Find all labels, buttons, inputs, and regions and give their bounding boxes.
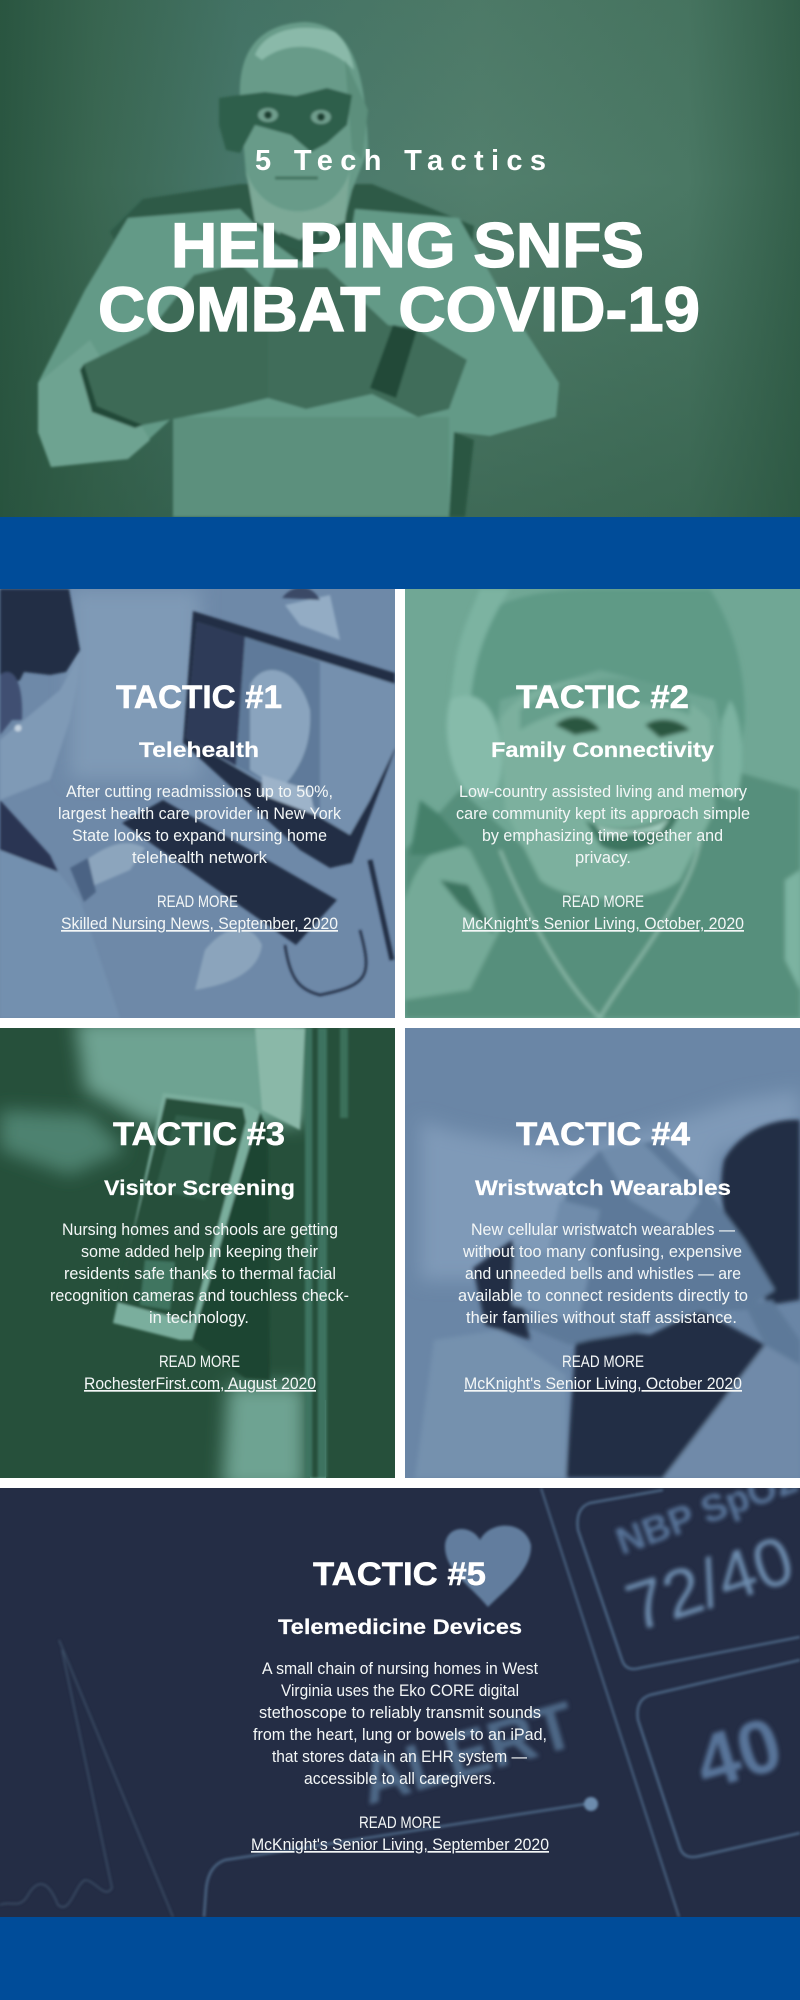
hero title: HELPING SNFS <box>171 211 644 281</box>
subheading: Telemedicine Devices <box>278 1616 522 1639</box>
read more link: READ MORE <box>159 1352 240 1371</box>
photo: clinician on video call <box>0 587 395 1018</box>
body text: their families without staff assistance. <box>466 1308 737 1327</box>
body text: and unneeded bells and whistles — are <box>465 1264 741 1283</box>
body text: telehealth network <box>132 848 267 867</box>
read more link <box>462 892 744 933</box>
body text: privacy. <box>575 848 631 867</box>
panel: tactic 4 wristwatch wearables <box>405 1028 800 1478</box>
blue band: bottom <box>0 1917 800 2000</box>
photo: thermal facial recognition device on door <box>0 1020 395 1490</box>
body text: stethoscope to reliably transmit sounds <box>259 1703 541 1722</box>
panel: tactic 1 telehealth <box>0 587 395 1018</box>
panel: hero header <box>0 0 800 517</box>
subheading: Visitor Screening <box>104 1177 295 1200</box>
read more link <box>464 1352 742 1393</box>
body text: that stores data in an EHR system — <box>272 1747 527 1766</box>
panel: tactic 2 family connectivity <box>405 589 800 1018</box>
monitor heart symbol <box>445 1526 531 1607</box>
body text: in technology. <box>149 1308 249 1327</box>
read more link <box>251 1813 549 1854</box>
body text: Virginia uses the Eko CORE digital <box>281 1681 519 1700</box>
heading: TACTIC #1 <box>116 679 282 715</box>
body text <box>456 782 750 867</box>
hero photo: masked senior superhero with boxing gloves <box>0 0 800 517</box>
body text <box>58 782 341 867</box>
hero subtitle: 5 Tech Tactics <box>255 145 546 177</box>
read more link: READ MORE <box>562 892 644 911</box>
body text: After cutting readmissions up to 50%, <box>66 782 333 801</box>
body text: largest health care provider in New York <box>58 804 341 823</box>
read more link: McKnight's Senior Living, October 2020 <box>464 1374 742 1393</box>
body text: Nursing homes and schools are getting <box>62 1220 338 1239</box>
photo: patient monitor screen <box>0 1459 800 1917</box>
body text <box>50 1220 349 1327</box>
hero title <box>98 211 700 345</box>
read more link <box>61 892 338 933</box>
read more link: Skilled Nursing News, September, 2020 <box>61 914 338 933</box>
read more link: READ MORE <box>157 892 238 911</box>
panel: tactic 3 visitor screening <box>0 1020 395 1490</box>
photo: elderly hands with smartwatch <box>405 1028 800 1478</box>
monitor frames and traces <box>0 1488 800 1917</box>
body text: without too many confusing, expensive <box>462 1242 742 1261</box>
body text: from the heart, lung or bowels to an iPad, <box>253 1725 547 1744</box>
body text: recognition cameras and touchless check- <box>50 1286 349 1305</box>
body text: some added help in keeping their <box>81 1242 318 1261</box>
monitor readouts: 40 <box>686 1701 791 1806</box>
read more link <box>84 1352 316 1393</box>
heading: TACTIC #4 <box>516 1116 690 1152</box>
heading: TACTIC #5 <box>313 1556 486 1592</box>
blue band: top <box>0 517 800 589</box>
read more link: READ MORE <box>562 1352 644 1371</box>
monitor readouts <box>368 1488 800 1806</box>
body text: A small chain of nursing homes in West <box>262 1659 538 1678</box>
subheading: Telehealth <box>139 739 259 762</box>
read more link: READ MORE <box>359 1813 441 1832</box>
body text: Low-country assisted living and memory <box>459 782 747 801</box>
monitor readouts: ALERT <box>351 1687 583 1818</box>
read more link: McKnight's Senior Living, September 2020 <box>251 1835 549 1854</box>
body text: available to connect residents directly to <box>458 1286 748 1305</box>
monitor readouts: NBP SpO2 <box>611 1459 800 1563</box>
body text: accessible to all caregivers. <box>304 1769 496 1788</box>
read more link: RochesterFirst.com, August 2020 <box>84 1374 316 1393</box>
read more link: McKnight's Senior Living, October, 2020 <box>462 914 744 933</box>
body text: residents safe thanks to thermal facial <box>64 1264 336 1283</box>
subheading: Wristwatch Wearables <box>475 1177 731 1200</box>
body text: by emphasizing time together and <box>482 826 723 845</box>
body text: State looks to expand nursing home <box>72 826 327 845</box>
body text <box>458 1220 748 1327</box>
body text: care community kept its approach simple <box>456 804 750 823</box>
body text: New cellular wristwatch wearables — <box>471 1220 735 1239</box>
monitor readouts: 72/40 <box>617 1521 800 1646</box>
panel: tactic 5 telemedicine devices <box>0 1459 800 1917</box>
heading: TACTIC #3 <box>113 1116 285 1152</box>
body text <box>253 1659 547 1788</box>
photo: smiling woman with headphones <box>405 589 800 1018</box>
subheading: Family Connectivity <box>491 739 714 762</box>
hero title: COMBAT COVID-19 <box>98 275 700 345</box>
heading: TACTIC #2 <box>516 679 689 715</box>
